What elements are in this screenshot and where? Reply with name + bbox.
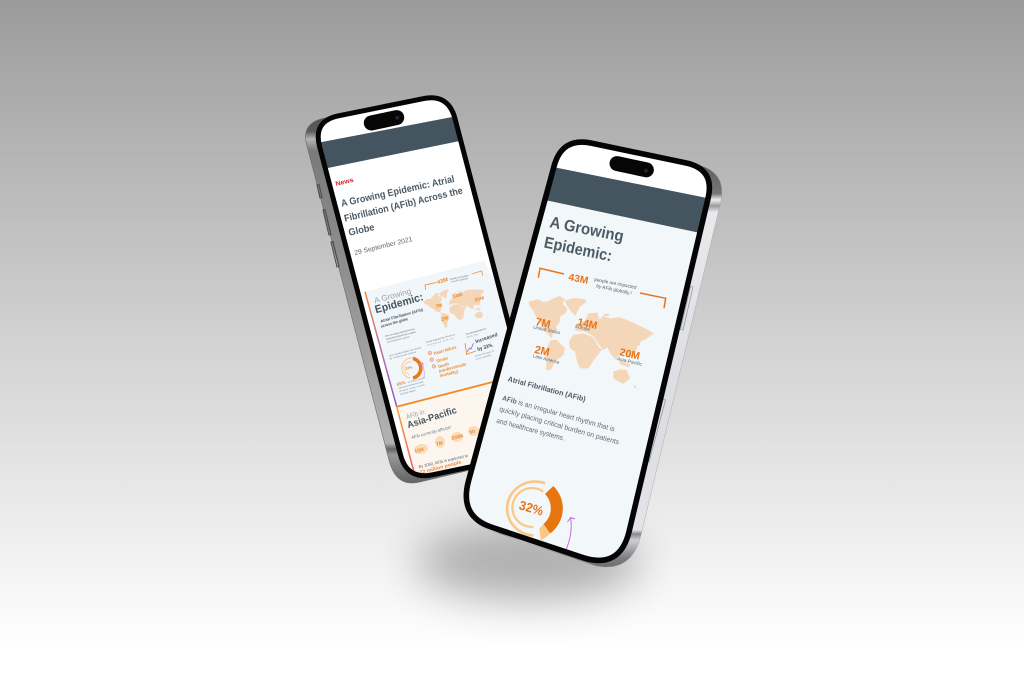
mini arrow — [420, 362, 424, 378]
right header bar — [545, 167, 715, 234]
65% stat: were from stroke and heart — [398, 380, 424, 390]
intro paragraph: AFib is an irregular heart rhythm that is — [385, 327, 416, 338]
increased stat: Increased — [475, 332, 498, 345]
right phone screen — [469, 144, 707, 558]
brackets — [538, 268, 666, 308]
right phone side buttons — [646, 286, 693, 462]
43M stat: 43M — [437, 277, 449, 286]
43M stat: by AFib globally.¹ — [596, 283, 633, 297]
country stats: 15M — [414, 447, 425, 455]
mini world map — [424, 290, 488, 328]
left phone bezel — [318, 98, 537, 476]
infographic heading: Atrial Fibrillation (AFib) — [380, 307, 424, 324]
risk list: (cardiovascular — [438, 361, 467, 374]
article date: 29 September 2021 — [354, 236, 413, 257]
global deaths paragraph: increased risk of: — [426, 337, 455, 347]
floor shadow — [416, 524, 640, 600]
intro paragraph: quickly placing critical burden on patients — [386, 330, 417, 341]
right phone notch — [608, 155, 655, 179]
article title: A Growing Epidemic: Atrial — [340, 174, 456, 210]
left phone side buttons — [317, 184, 339, 267]
global deaths paragraph: AFib has — [466, 333, 480, 339]
mini donut chart: 32% — [405, 365, 414, 371]
risk list: Stroke — [436, 355, 449, 364]
map labels: United States — [533, 325, 561, 335]
title — [544, 217, 624, 262]
infographic heading: across the globe — [380, 316, 409, 329]
article category: News — [335, 177, 355, 188]
article title: Globe — [348, 222, 376, 239]
infographic heading: Epidemic: — [374, 291, 425, 316]
panel side strip — [365, 292, 397, 407]
purple arrow — [565, 518, 575, 552]
risk list: Death — [438, 361, 450, 369]
mini map labels: 2M — [441, 315, 449, 323]
risk icons — [428, 351, 436, 368]
65% stat: disease, many caused — [399, 384, 426, 393]
43M stat: 43M — [567, 272, 589, 287]
right phone — [464, 139, 722, 568]
country stats: 7M — [435, 440, 443, 448]
left header bar — [321, 117, 458, 168]
title: Epidemic: — [542, 235, 614, 265]
43M stat — [568, 274, 636, 295]
infographic heading — [374, 289, 423, 328]
country stats: 50 — [469, 429, 476, 436]
right phone bezel — [466, 142, 709, 560]
projection text: 72 million people — [419, 459, 462, 476]
65% stat: of these deaths — [407, 376, 427, 384]
section divider — [396, 381, 493, 408]
43M stat — [438, 274, 468, 284]
intro paragraph: and healthcare systems. — [387, 335, 411, 344]
afib heading: Atrial Fibrillation (AFib) — [507, 374, 587, 404]
projection text — [418, 454, 468, 474]
global deaths paragraph: 32% of global deaths are caused — [389, 346, 422, 358]
article title — [340, 174, 464, 239]
map labels: 2M — [533, 344, 551, 359]
country blobs — [413, 426, 480, 456]
mini map labels: 7M — [435, 303, 443, 310]
left phone notch — [362, 109, 406, 132]
left phone — [305, 95, 510, 484]
mini donut chart — [402, 358, 421, 378]
title: A Growing — [548, 214, 625, 246]
trend note: years globally — [475, 353, 493, 361]
mini map labels — [435, 292, 485, 323]
map labels: Asia-Pacific — [616, 356, 643, 367]
map labels: 14M — [576, 316, 599, 332]
map labels — [532, 316, 643, 367]
asia-pacific panel — [398, 383, 492, 473]
left phone frame — [306, 98, 538, 483]
article title: Fibrillation (AFib) Across the — [343, 185, 464, 225]
increased stat — [475, 332, 498, 352]
projection text: By 2050, AFib is expected to — [418, 453, 469, 469]
43M stat: people are impacted — [594, 277, 637, 291]
risk list: Heart failure — [433, 344, 457, 356]
risk list: mortality) — [439, 369, 459, 378]
global deaths paragraph: by cardiovascular disease — [389, 350, 417, 360]
country stats — [414, 430, 475, 453]
global deaths paragraph — [389, 327, 487, 360]
trend note: during the past 20 — [474, 349, 495, 358]
global deaths paragraph: People impacted by AFib are at — [425, 333, 456, 344]
increased stat: by 33% — [477, 343, 494, 353]
donut chart: 32% — [517, 497, 546, 519]
65% stat — [396, 377, 426, 395]
asia-pacific heading: AFib in — [405, 409, 426, 421]
65% stat: by heart attacks — [400, 389, 417, 396]
afib paragraph: quickly placing critical burden on patients — [498, 404, 621, 447]
43M brackets — [425, 271, 483, 290]
world map — [528, 296, 654, 389]
map labels: Latin America — [532, 353, 560, 365]
afib paragraph: AFib is an irregular heart rhythm that is — [501, 393, 616, 434]
top white band — [556, 145, 706, 198]
asia-pacific heading: Asia-Pacific — [406, 405, 459, 431]
mini map labels: 14M — [452, 292, 463, 300]
65% stat: 65% — [396, 380, 406, 387]
43M stat: people are impacted — [450, 274, 469, 281]
43M stat: by AFib globally — [451, 277, 469, 283]
trend note — [474, 350, 494, 360]
right phone frame — [466, 142, 722, 567]
infographic panel — [366, 261, 507, 406]
afib paragraph: and healthcare systems. — [495, 416, 566, 443]
asia-pacific heading — [406, 408, 457, 439]
map labels: 20M — [618, 346, 641, 363]
asia-pacific heading: AFib currently affects¹ — [411, 424, 452, 440]
country stats: 258k — [451, 433, 464, 442]
map labels: Europe — [575, 324, 591, 332]
risk list — [433, 344, 467, 378]
intro paragraph — [385, 328, 416, 343]
donut chart — [507, 482, 563, 540]
lower side strip — [397, 407, 415, 476]
map labels: 7M — [534, 316, 552, 331]
global deaths paragraph: The worldwide prevalence of — [465, 327, 487, 336]
trend chart icon — [465, 343, 476, 354]
mini map labels: 20M — [474, 295, 485, 304]
left phone screen — [320, 100, 507, 474]
infographic heading: A Growing — [373, 287, 412, 305]
